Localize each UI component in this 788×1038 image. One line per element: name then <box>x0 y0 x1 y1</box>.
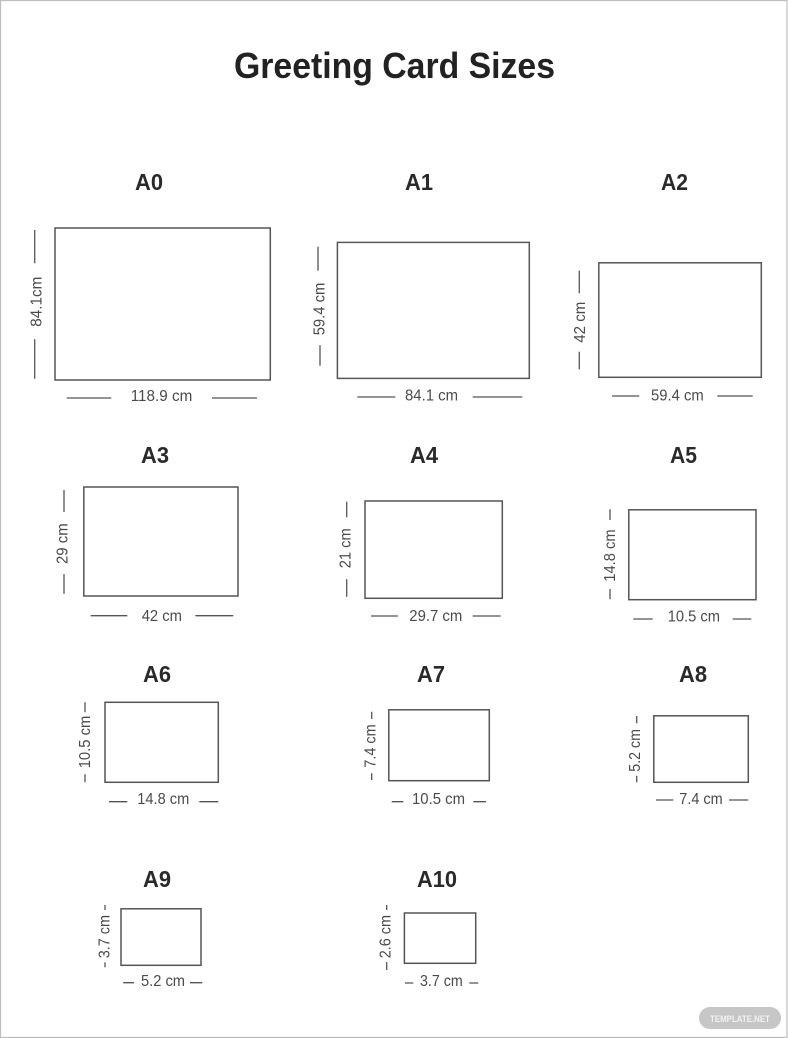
width label: A6: 14.8 cm <box>137 791 189 808</box>
card outline: A10 <box>404 913 476 963</box>
card outline: A4 <box>365 501 502 598</box>
heading: A0: A0 <box>135 169 163 195</box>
height label: A2: 42 cm <box>572 302 589 343</box>
width label: A1: 84.1 cm <box>405 388 458 405</box>
heading: A4: A4 <box>410 442 438 468</box>
heading: A9: A9 <box>143 866 171 892</box>
width label: A10: 3.7 cm <box>420 973 463 990</box>
heading: A1: A1 <box>405 169 433 195</box>
card outline: A8 <box>654 716 748 782</box>
panel: A2 <box>572 169 761 405</box>
panel: A7 <box>363 661 489 808</box>
height label: A3: 29 cm <box>55 523 72 564</box>
panel: A6 <box>77 661 218 808</box>
heading: A8: A8 <box>679 661 707 687</box>
heading: A10: A10 <box>417 866 457 892</box>
card outline: A9 <box>121 909 201 965</box>
height label: A5: 14.8 cm <box>602 529 619 582</box>
height label: A9: 3.7 cm <box>96 915 113 958</box>
title: Greeting Card Sizes <box>234 45 555 86</box>
width label: A0: 118.9 cm <box>131 388 192 405</box>
width label: A9: 5.2 cm <box>141 973 185 990</box>
card outline: A3 <box>84 487 238 596</box>
height label: A8: 5.2 cm <box>627 729 644 772</box>
card outline: A5 <box>629 510 756 600</box>
height label: A4: 21 cm <box>338 528 355 568</box>
watermark badge: TEMPLATE.NET <box>710 1014 770 1025</box>
panel: A0 <box>29 169 270 405</box>
width label: A3: 42 cm <box>142 608 182 625</box>
heading: A5: A5 <box>670 442 697 468</box>
panel: A5 <box>602 442 756 626</box>
heading: A3: A3 <box>141 442 169 468</box>
card outline: A7 <box>389 710 489 781</box>
card outline: A6 <box>105 702 218 782</box>
width label: A5: 10.5 cm <box>668 609 720 626</box>
width label: A2: 59.4 cm <box>651 388 704 405</box>
width label: A7: 10.5 cm <box>412 791 465 808</box>
card outline: A1 <box>337 242 529 378</box>
height label: A10: 2.6 cm <box>378 915 395 958</box>
panel: A3 <box>55 442 238 625</box>
card outline: A2 <box>599 263 761 377</box>
height label: A1: 59.4 cm <box>311 283 328 335</box>
panel: A4 <box>338 442 502 625</box>
height label: A7: 7.4 cm <box>363 724 380 768</box>
panel: A8 <box>627 661 748 808</box>
card outline: A0 <box>55 228 270 380</box>
panel: A9 <box>96 866 202 990</box>
heading: A7: A7 <box>417 661 445 687</box>
height label: A0: 84.1cm <box>29 277 46 327</box>
width label: A4: 29.7 cm <box>409 608 462 625</box>
panel: A1 <box>311 169 529 405</box>
watermark badge <box>699 1007 781 1029</box>
width label: A8: 7.4 cm <box>679 791 723 808</box>
panel: A10 <box>378 866 478 990</box>
heading: A2: A2 <box>661 169 688 195</box>
heading: A6: A6 <box>143 661 171 687</box>
height label: A6: 10.5 cm <box>77 716 94 768</box>
